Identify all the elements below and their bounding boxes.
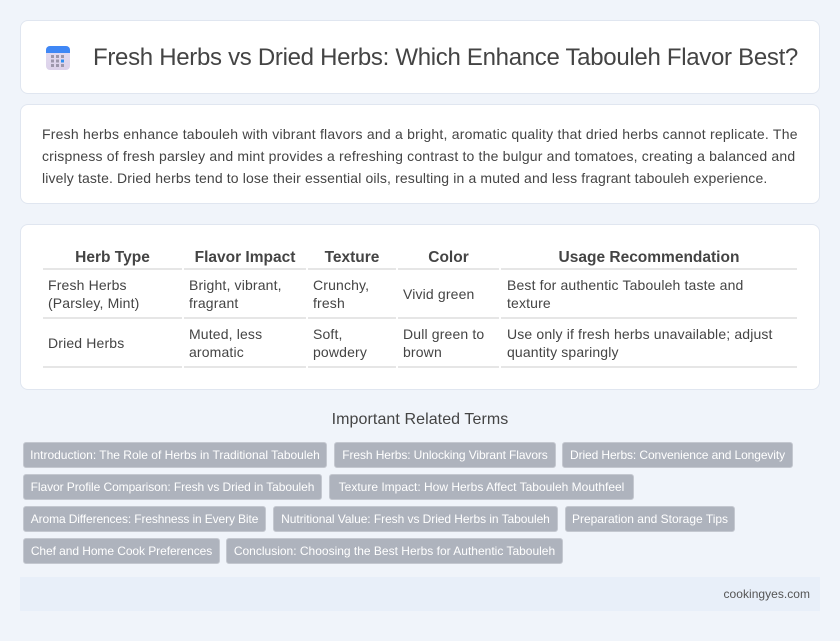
related terms tags: Chef and Home Cook Preferences — [31, 544, 212, 558]
related terms tags: Preparation and Storage Tips — [572, 512, 728, 526]
comparison table: quantity sparingly — [507, 344, 619, 360]
comparison table: Best for authentic Tabouleh taste and — [507, 277, 743, 293]
comparison table: fragrant — [189, 295, 238, 311]
comparison table: Soft, — [313, 326, 343, 342]
related terms heading: Important Related Terms — [332, 411, 508, 428]
icon: calendar — [46, 46, 70, 70]
comparison table: Vivid green — [403, 286, 474, 302]
comparison table: powdery — [313, 344, 367, 360]
comparison table: Dull green to — [403, 326, 484, 342]
comparison table: Muted, less — [189, 326, 262, 342]
comparison table: brown — [403, 344, 442, 360]
comparison table panel — [20, 224, 820, 390]
related terms tags: Fresh Herbs: Unlocking Vibrant Flavors — [342, 448, 548, 462]
related terms tags: Flavor Profile Comparison: Fresh vs Dried in Tabouleh — [31, 480, 314, 494]
comparison table: fresh — [313, 295, 345, 311]
related terms tags: Dried Herbs: Convenience and Longevity — [570, 448, 785, 462]
comparison table: Herb Type — [75, 249, 150, 266]
comparison table: Bright, vibrant, — [189, 277, 282, 293]
comparison table: (Parsley, Mint) — [48, 295, 139, 311]
related terms tags: Introduction: The Role of Herbs in Traditional Tabouleh — [30, 448, 320, 462]
related terms tags: Conclusion: Choosing the Best Herbs for Authentic Tabouleh — [234, 544, 555, 558]
comparison table: Use only if fresh herbs unavailable; adjust — [507, 326, 773, 342]
intro text — [42, 126, 798, 186]
comparison table: Fresh Herbs — [48, 277, 127, 293]
comparison table: texture — [507, 295, 551, 311]
comparison table: aromatic — [189, 344, 244, 360]
related terms tags: Nutritional Value: Fresh vs Dried Herbs in Tabouleh — [281, 512, 550, 526]
related terms tags: Aroma Differences: Freshness in Every Bite — [31, 512, 258, 526]
footer source: cookingyes.com — [724, 587, 810, 601]
comparison table: Color — [428, 249, 469, 266]
comparison table: Crunchy, — [313, 277, 369, 293]
intro text: crispness of fresh parsley and mint provides a refreshing contrast to the bulgur and tomatoes, creating a balanced and — [42, 148, 795, 164]
related terms tags: Texture Impact: How Herbs Affect Tabouleh Mouthfeel — [339, 480, 624, 494]
comparison table: Flavor Impact — [195, 249, 295, 266]
footer — [20, 577, 820, 611]
comparison table: Usage Recommendation — [559, 249, 739, 266]
title card — [20, 20, 820, 94]
intro text: lively taste. Dried herbs tend to lose their essential oils, resulting in a muted and less fragrant tabouleh experience. — [42, 170, 767, 186]
comparison table: Dried Herbs — [48, 335, 124, 351]
comparison table: Texture — [325, 249, 379, 266]
intro panel — [20, 104, 820, 204]
intro text: Fresh herbs enhance tabouleh with vibrant flavors and a bright, aromatic quality that dried herbs cannot replicate. The — [42, 126, 798, 142]
title: Fresh Herbs vs Dried Herbs: Which Enhance Tabouleh Flavor Best? — [93, 44, 798, 71]
